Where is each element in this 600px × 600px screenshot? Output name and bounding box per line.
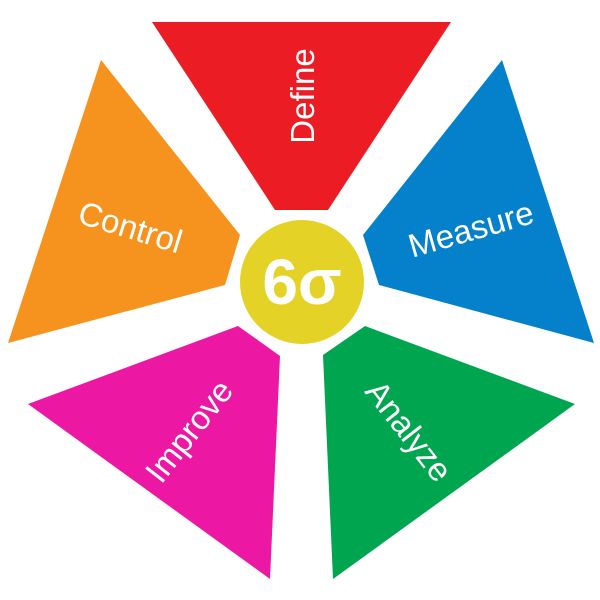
label: control: Control	[74, 194, 187, 260]
panel: control	[8, 60, 240, 343]
label: 6σ: 6σ	[262, 246, 342, 318]
panel: define	[152, 22, 451, 210]
label: improve: Improve	[138, 373, 240, 489]
label: define: Define	[284, 48, 321, 144]
panel: improve	[28, 326, 280, 579]
panel: analyze	[323, 326, 575, 579]
panel: measure	[363, 60, 594, 343]
label: analyze: Analyze	[358, 373, 460, 489]
center circle: 6 sigma	[240, 220, 364, 344]
label: measure: Measure	[404, 193, 538, 264]
